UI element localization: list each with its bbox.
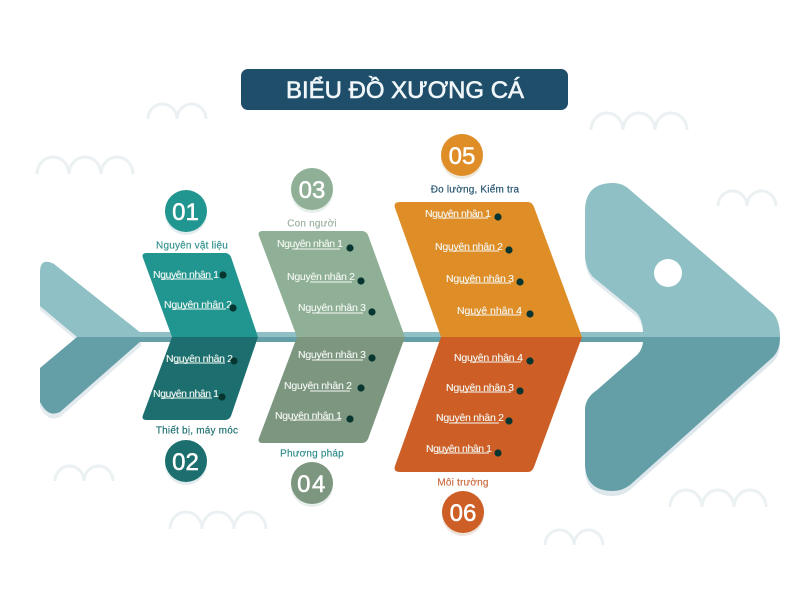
causes 06 bbox=[426, 352, 534, 457]
causes 02 bbox=[153, 353, 238, 401]
badge 04 bbox=[291, 462, 333, 507]
causes 05 bbox=[425, 208, 534, 318]
causes 06: Nguyên nhân 2 bbox=[436, 412, 504, 424]
fish spine bbox=[130, 332, 644, 342]
badge 01: 01 bbox=[172, 199, 199, 226]
causes 03 bbox=[277, 238, 376, 316]
causes 04: Nguyên nhân 3 bbox=[298, 349, 366, 361]
causes 03: Nguyên nhân 2 bbox=[287, 271, 355, 283]
causes 02: Nguyên nhân 2 bbox=[166, 353, 233, 365]
panel: 06 Môi trường bbox=[395, 337, 582, 472]
badge 05: 05 bbox=[449, 143, 475, 170]
label: Phương pháp: Phương pháp bbox=[280, 448, 344, 460]
badge 03 bbox=[291, 168, 333, 213]
panel: 03 Con người bbox=[258, 231, 405, 337]
causes 06: Nguyên nhân 1 bbox=[426, 443, 492, 455]
label: Đo lường, Kiểm tra: Đo lường, Kiểm tra bbox=[431, 184, 520, 196]
badge 06: 06 bbox=[450, 500, 476, 527]
causes 02: Nguyên nhân 1 bbox=[153, 388, 219, 400]
causes 06: Nguyên nhân 4 bbox=[454, 352, 523, 364]
panel: 04 Phương pháp bbox=[258, 337, 405, 443]
fish eye bbox=[654, 259, 682, 287]
causes 03: Nguyên nhân 1 bbox=[277, 238, 343, 250]
causes 04: Nguyên nhân 2 bbox=[284, 380, 352, 392]
panel: 05 Đo lường, Kiểm tra bbox=[395, 202, 582, 337]
label: Nguyên vật liệu: Nguyên vật liệu bbox=[156, 240, 228, 252]
causes 06: Nguyên nhân 3 bbox=[446, 382, 514, 394]
causes 05: Nguyên nhân 1 bbox=[425, 208, 491, 220]
label: Môi trường: Môi trường bbox=[437, 478, 489, 488]
title: BIỂU ĐỒ XƯƠNG CÁ bbox=[286, 76, 524, 104]
badge 05 bbox=[441, 134, 483, 179]
fish head bbox=[585, 183, 780, 496]
label: Thiết bị, máy móc: Thiết bị, máy móc bbox=[156, 424, 238, 436]
causes 05: Nguyê nhân 4 bbox=[457, 305, 522, 317]
causes 04 bbox=[275, 349, 376, 423]
panel: 01 Nguyên vật liệu bbox=[142, 253, 258, 337]
badge 03: 03 bbox=[299, 177, 325, 204]
panel: 02 Thiết bị, máy móc bbox=[142, 337, 258, 420]
badge 04: 04 bbox=[297, 471, 327, 498]
causes 03: Nguyên nhân 3 bbox=[298, 302, 366, 314]
fish tail bbox=[40, 262, 141, 419]
badge 06 bbox=[442, 491, 484, 536]
badge 02 bbox=[165, 440, 207, 485]
causes 05: Nguyên nhân 3 bbox=[446, 273, 514, 285]
badge 01 bbox=[165, 190, 207, 235]
causes 01: Nguyên nhân 1 bbox=[153, 269, 219, 281]
causes 01 bbox=[153, 269, 237, 312]
causes 05: Nguyên nhân 2 bbox=[435, 241, 503, 253]
causes 04: Nguyên nhân 1 bbox=[275, 410, 342, 422]
badge 02: 02 bbox=[172, 449, 199, 476]
title bbox=[241, 69, 568, 110]
causes 01: Nguyên nhân 2 bbox=[164, 299, 232, 311]
label: Con người: Con người bbox=[287, 218, 337, 230]
